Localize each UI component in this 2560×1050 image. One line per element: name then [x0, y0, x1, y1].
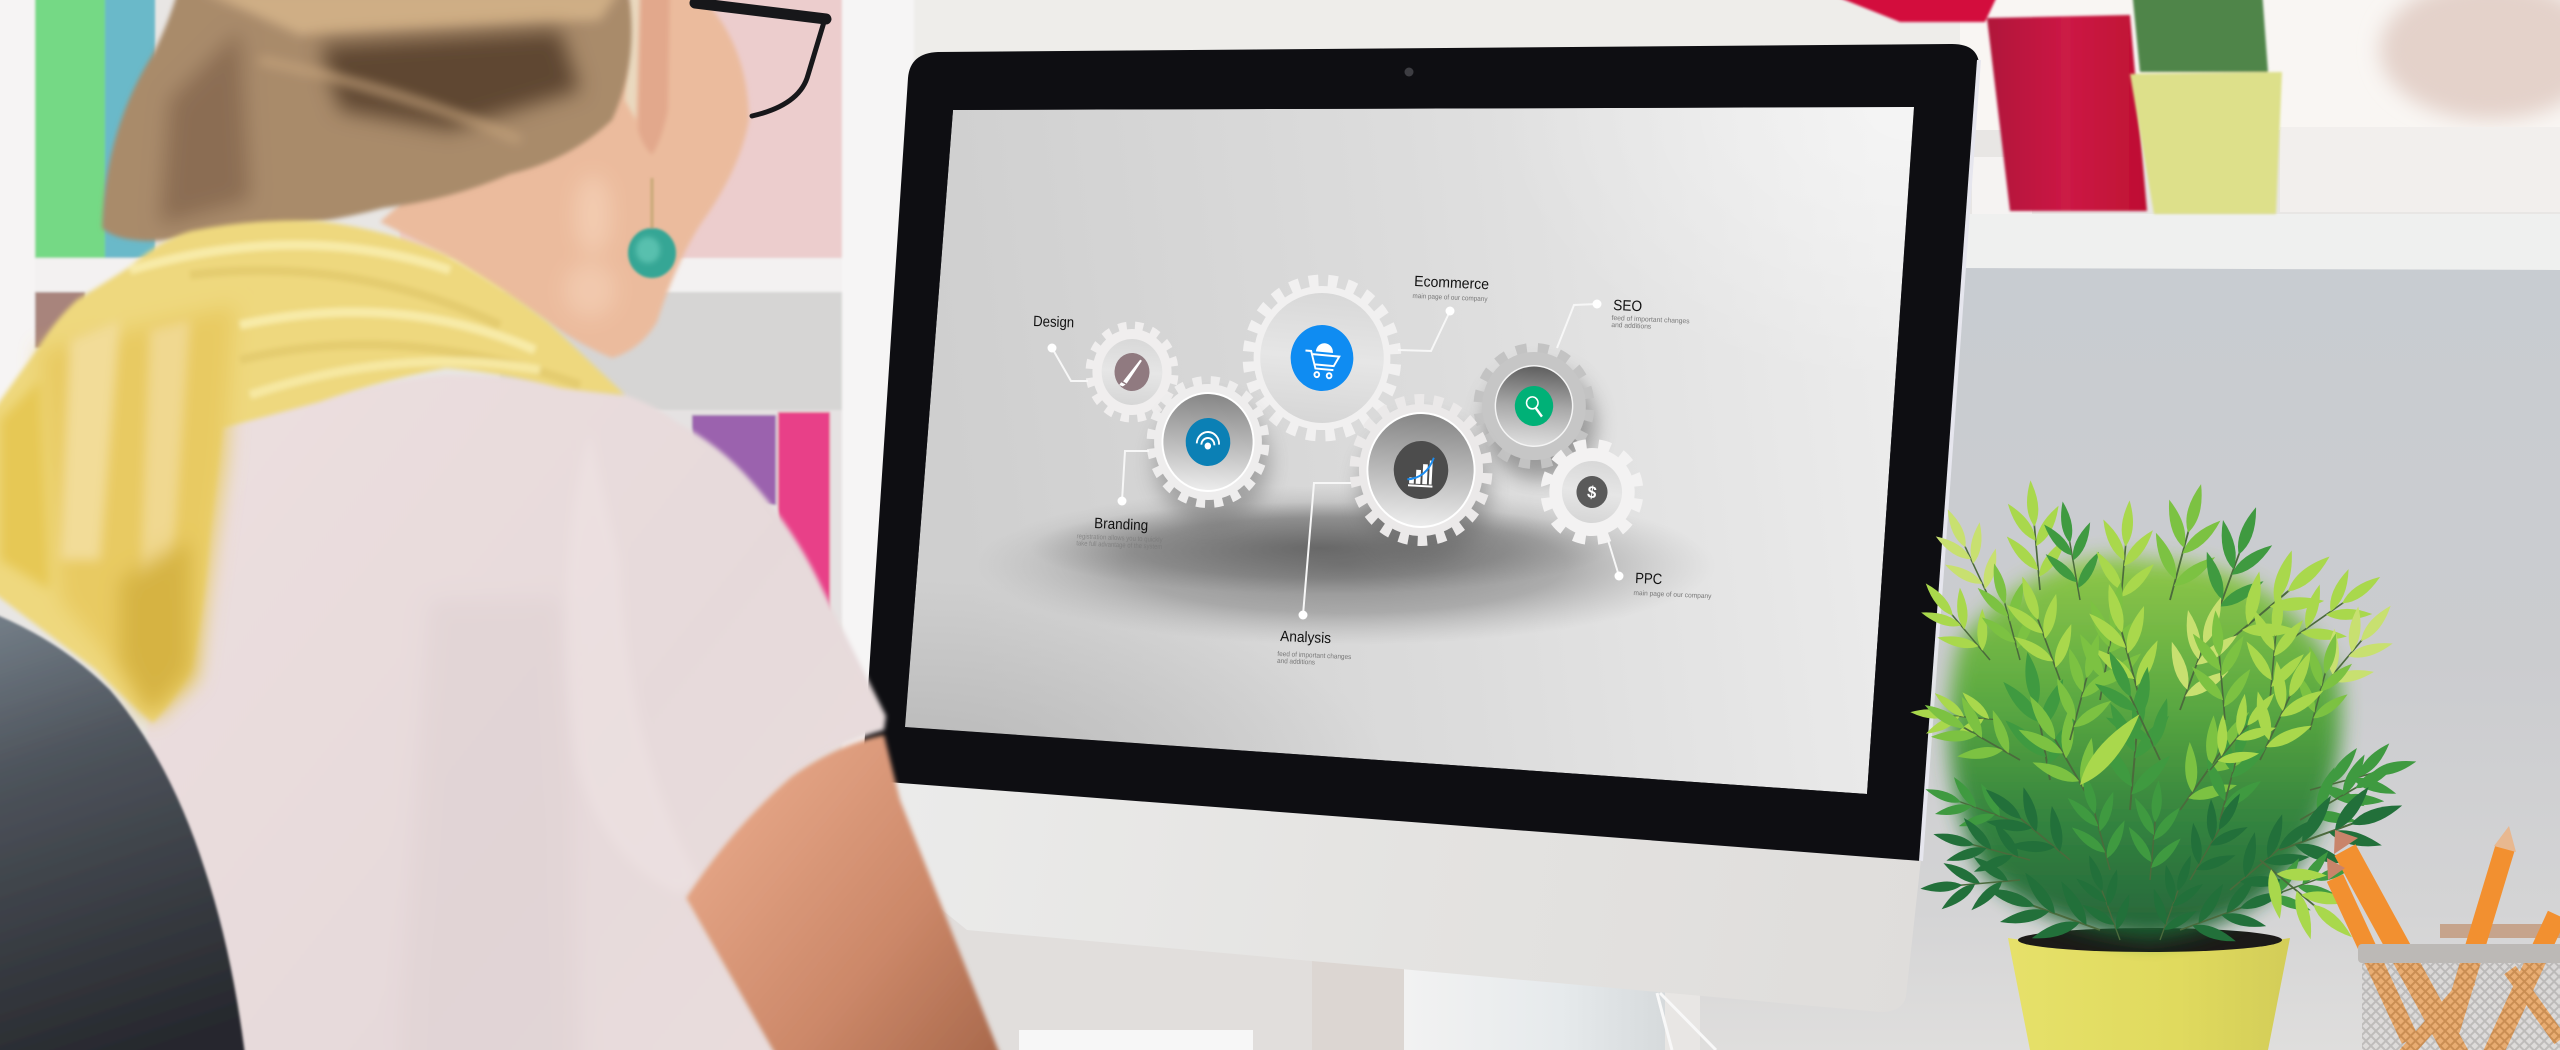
label: Branding [1076, 518, 1162, 550]
monitor stand and base [1019, 960, 1716, 1050]
woman: yellow scarf [0, 220, 625, 723]
icon: signal arcs [1197, 431, 1220, 449]
icon: bar chart with trend [1407, 456, 1434, 488]
label: Ecommerce [1412, 276, 1488, 303]
gear: Analysis [1352, 396, 1491, 560]
window and sill, top right [1960, 0, 2560, 217]
connector: Analysis [1298, 483, 1351, 620]
green plant [1903, 475, 2425, 965]
label: SEO: and additions [1611, 322, 1652, 331]
left bookshelf [0, 0, 914, 1050]
label: PPC: PPC [1635, 570, 1663, 588]
pencils [2335, 848, 2560, 1050]
monitor bezel [862, 44, 1979, 861]
pencil holder with pencils [2327, 826, 2560, 1050]
gear: PPC [1539, 438, 1645, 546]
gear: Ecommerce [1243, 275, 1401, 441]
woman: turquoise earring [628, 178, 676, 278]
icon: paint brush [1119, 358, 1142, 388]
label: Design: Design [1033, 313, 1074, 331]
gear: SEO [1475, 344, 1596, 480]
woman: t-shirt [120, 375, 886, 1050]
connector: SEO [1557, 300, 1602, 348]
icon: magnifier [1526, 396, 1543, 417]
wall shelf, right [1958, 214, 2560, 270]
label: Analysis: Analysis [1280, 628, 1331, 647]
woman: forearm [686, 735, 1010, 1050]
ear [638, 0, 670, 155]
label: Ecommerce: main page of our company [1412, 293, 1488, 303]
gear ground shadow [1017, 493, 1684, 638]
icon: shopping cart with globe [1303, 341, 1340, 379]
gear: Branding [1148, 378, 1270, 524]
label: Analysis: feed of important changes [1277, 651, 1352, 661]
label: Branding: take full advantage of the system [1076, 540, 1163, 551]
label: Branding: Branding [1094, 515, 1149, 534]
gear: Design [1087, 323, 1177, 421]
woman: chair back [0, 612, 248, 1050]
label: Branding: registration allows you to quickly [1076, 533, 1163, 544]
woman: hair [102, 0, 632, 241]
label: SEO: SEO [1613, 297, 1642, 315]
icon: dollar sign: $ [1586, 482, 1598, 503]
connector: PPC [1608, 540, 1624, 580]
label: Analysis: and additions [1277, 658, 1316, 667]
connector: Ecommerce [1398, 306, 1454, 351]
woman: skin, neck and face [380, 0, 749, 358]
pencil tips [2327, 830, 2358, 880]
yellow pot with plant on shelf [2130, 0, 2282, 214]
red flower and pot on shelf [1820, 0, 2147, 211]
yellow plant pot [2008, 928, 2290, 1050]
label: PPC: main page of our company [1633, 590, 1712, 600]
label: Ecommerce: Ecommerce [1414, 273, 1489, 293]
woman: glasses [695, 3, 826, 116]
panel: monitor screen [905, 107, 1914, 794]
label: SEO: feed of important changes [1611, 315, 1690, 325]
connector: Branding [1118, 451, 1149, 506]
label: PPC [1634, 572, 1712, 600]
monitor chin [872, 778, 1921, 1012]
label: Analysis [1277, 630, 1351, 664]
connector: Design [1048, 344, 1088, 381]
label: SEO [1612, 300, 1690, 329]
